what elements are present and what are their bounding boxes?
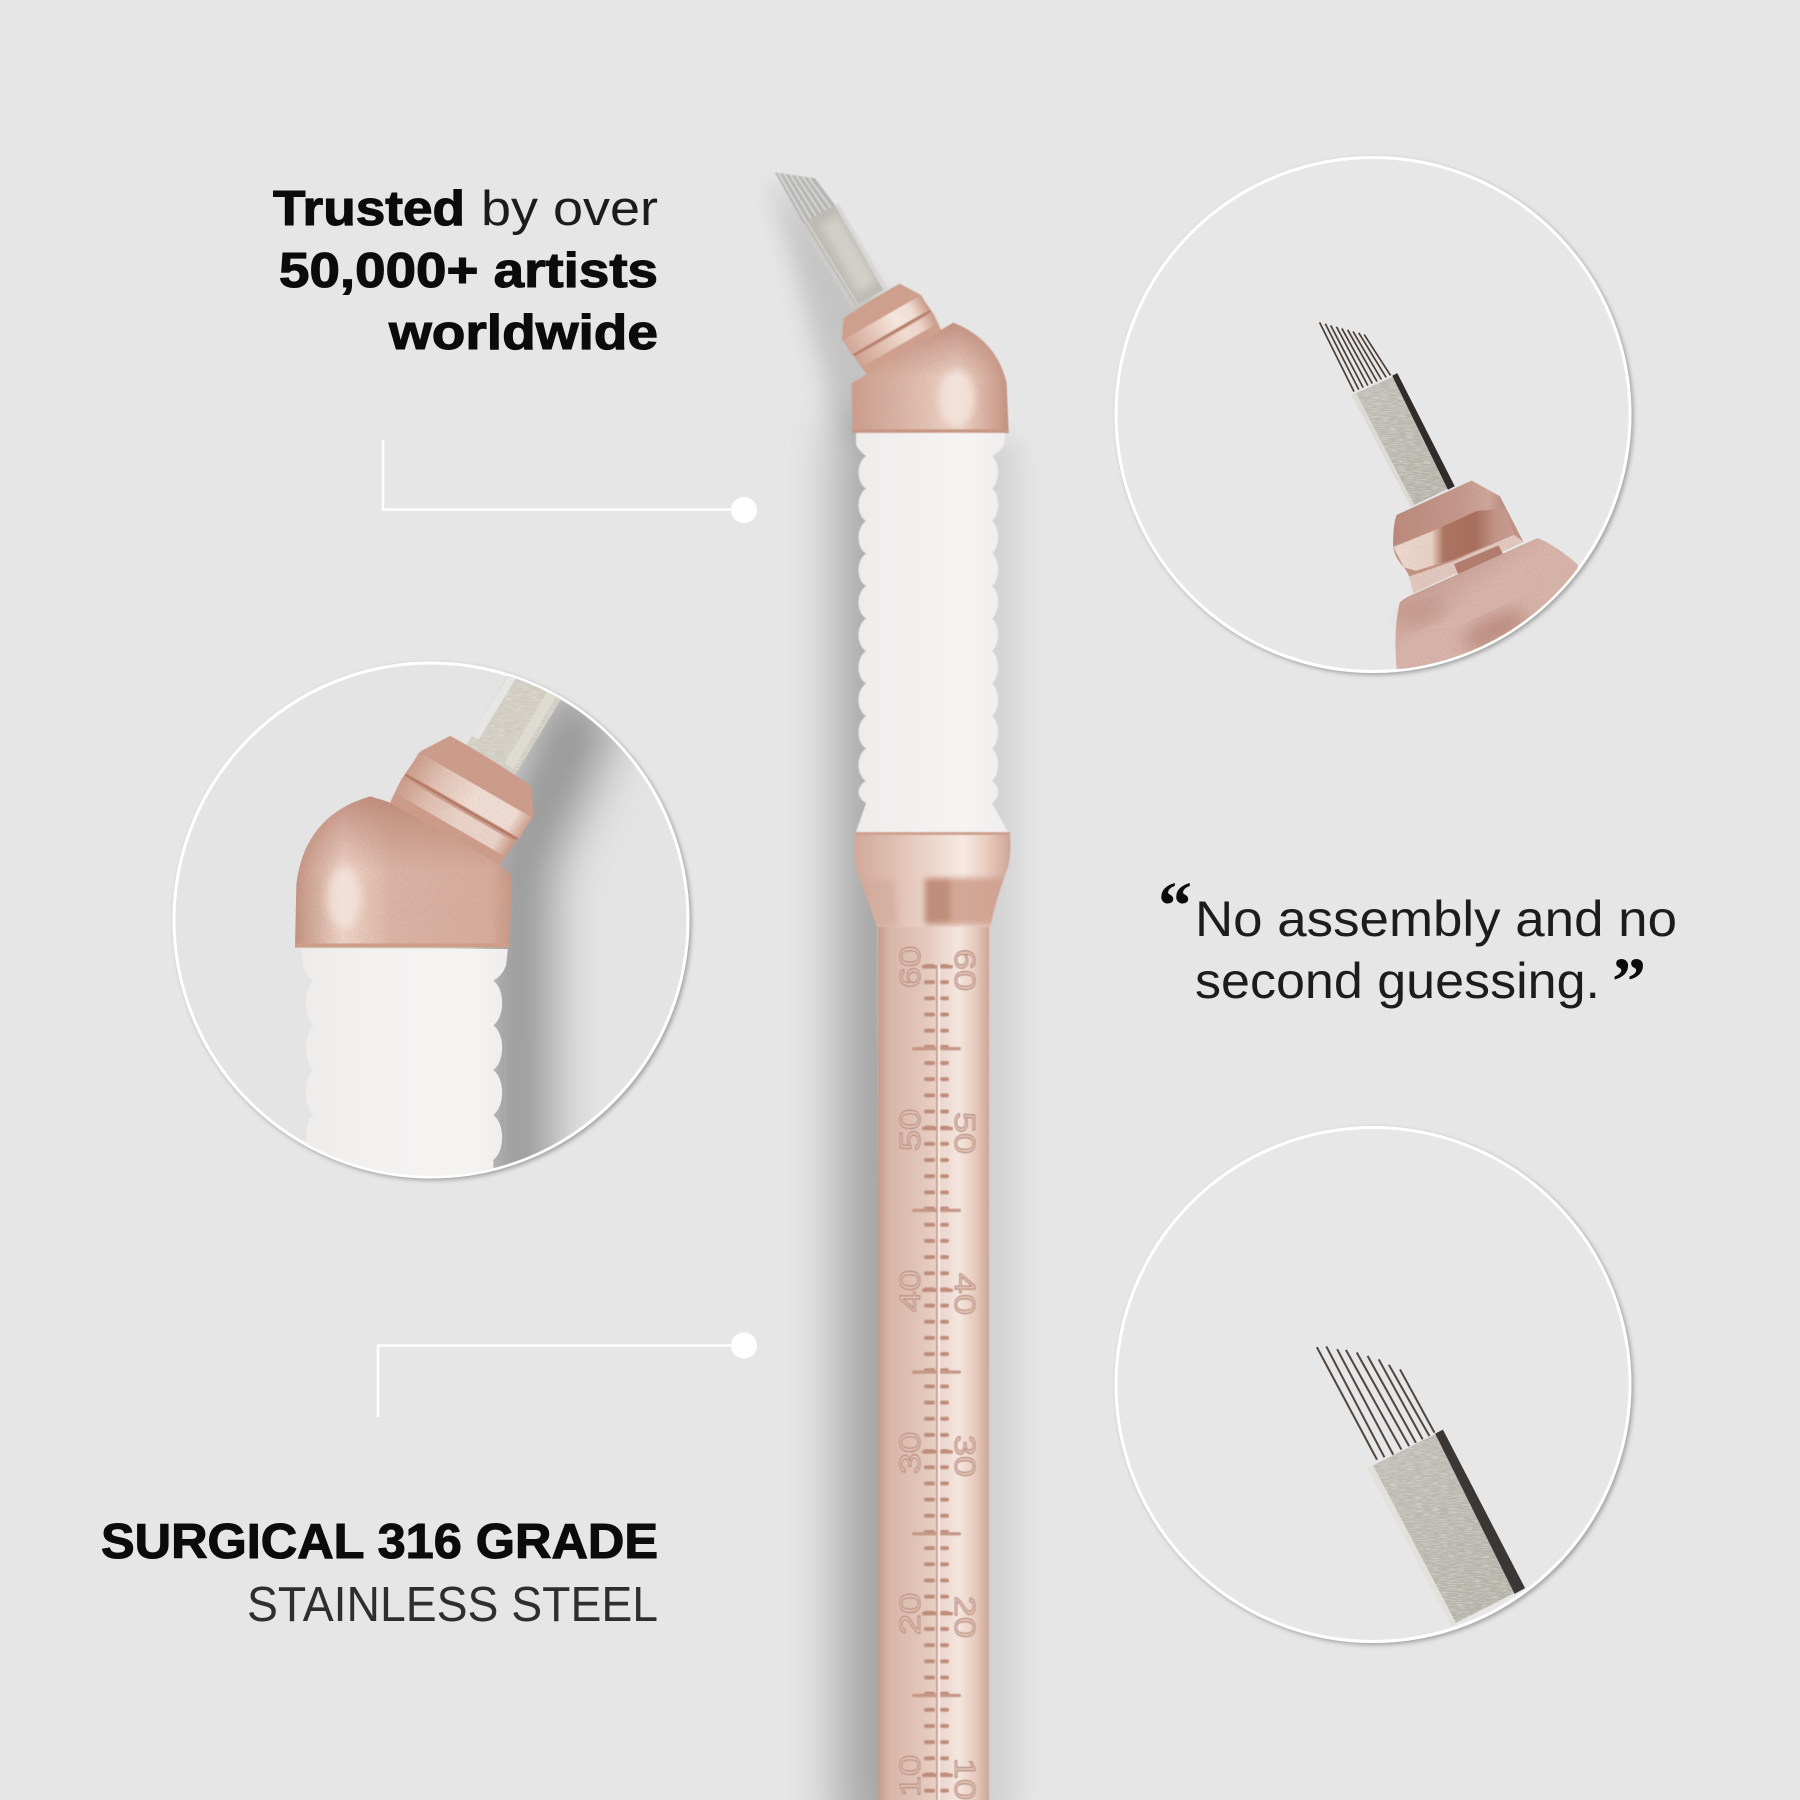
circle: needle tip and collar detail bbox=[1116, 158, 1630, 672]
needles bbox=[1320, 322, 1391, 392]
scale numbers: 10 bbox=[948, 1758, 981, 1800]
scale numbers: 20 bbox=[948, 1596, 981, 1638]
scale numbers: 60 bbox=[948, 949, 981, 991]
scale numbers: 50 bbox=[894, 1109, 927, 1151]
scale numbers: 60 bbox=[894, 946, 927, 988]
needles bbox=[1317, 1346, 1434, 1460]
headline: trusted by artists: 50,000+ artists bbox=[279, 244, 658, 298]
circle: needle close-up bbox=[1116, 1128, 1630, 1642]
scale ticks bbox=[910, 963, 966, 1800]
scale numbers bbox=[894, 946, 981, 1800]
white ribbed grip bbox=[856, 433, 1008, 832]
headline: trusted by artists: worldwide bbox=[388, 306, 658, 360]
collar bbox=[1393, 481, 1523, 593]
brown band reflection bbox=[874, 874, 1004, 927]
headline: trusted by artists bbox=[273, 182, 658, 360]
scale numbers: 40 bbox=[948, 1273, 981, 1315]
shadow beside pen bbox=[487, 671, 618, 1215]
grip bbox=[302, 949, 508, 1176]
heading: surgical grade steel bbox=[101, 1515, 658, 1632]
collar bbox=[832, 276, 947, 383]
blade bbox=[1368, 1430, 1524, 1625]
rose gold barrel with scale bbox=[850, 832, 1012, 1800]
quote: No assembly and no bbox=[1195, 891, 1677, 947]
scale numbers: 50 bbox=[948, 1112, 981, 1154]
pen shadow bbox=[770, 175, 1020, 1800]
scale numbers: 30 bbox=[948, 1435, 981, 1477]
collar bbox=[390, 736, 534, 865]
closing quote mark: ” bbox=[1612, 943, 1646, 1019]
quote: second guessing. bbox=[1195, 953, 1600, 1009]
callout line bottom bbox=[378, 1332, 757, 1417]
blade tip bbox=[775, 173, 887, 307]
dome bbox=[1395, 538, 1578, 671]
circle: dome and grip detail bbox=[174, 647, 688, 1215]
scale numbers: 20 bbox=[894, 1593, 927, 1635]
scale numbers: 30 bbox=[894, 1432, 927, 1474]
quote bbox=[1158, 867, 1677, 1019]
headline: trusted by artists: by over bbox=[481, 182, 658, 236]
heading: surgical grade steel: STAINLESS STEEL bbox=[247, 1578, 658, 1632]
blade bbox=[466, 676, 561, 775]
dome bbox=[295, 796, 512, 946]
heading: surgical grade steel: SURGICAL 316 GRADE bbox=[101, 1515, 658, 1569]
microblading pen bbox=[775, 173, 1012, 1800]
scale numbers: 40 bbox=[894, 1270, 927, 1312]
rose gold dome bbox=[852, 323, 1009, 433]
callout line top bbox=[383, 440, 757, 523]
blade bbox=[1352, 375, 1450, 507]
opening quote mark: “ bbox=[1158, 867, 1192, 943]
scale numbers: 10 bbox=[894, 1755, 927, 1797]
headline: trusted by artists: Trusted bbox=[273, 182, 465, 236]
